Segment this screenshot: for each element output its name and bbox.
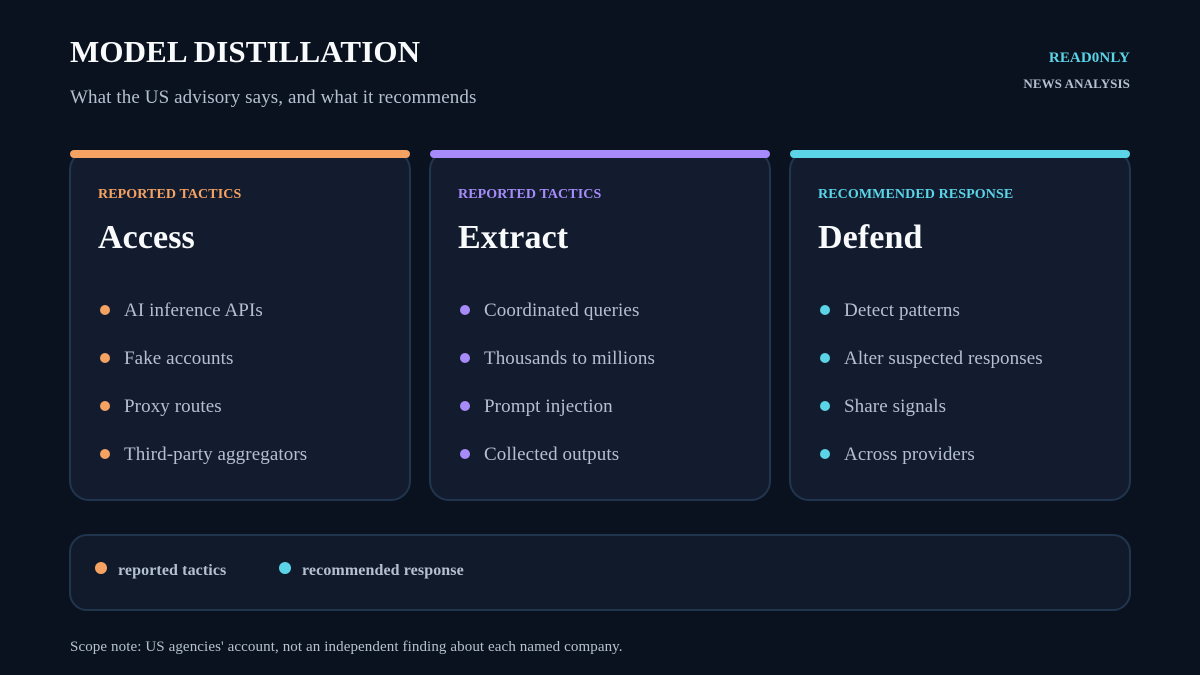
list item: Across providers: Across providers bbox=[844, 444, 975, 465]
panel heading: extract: Extract bbox=[458, 219, 568, 256]
list item: Alter suspected responses: Alter suspected responses bbox=[844, 348, 1043, 369]
brand tagline: NEWS ANALYSIS bbox=[1023, 76, 1130, 91]
list item: Fake accounts: Fake accounts bbox=[124, 348, 233, 369]
brand name: READ0NLY bbox=[1049, 50, 1130, 66]
bullet list: extract bbox=[460, 300, 655, 465]
panel heading: defend: Defend bbox=[818, 219, 922, 256]
subtitle: What the US advisory says, and what it recommends bbox=[70, 87, 476, 108]
list item: Thousands to millions: Thousands to millions bbox=[484, 348, 655, 369]
panel category label: defend: RECOMMENDED RESPONSE bbox=[818, 187, 1013, 202]
list item: Collected outputs: Collected outputs bbox=[484, 444, 619, 465]
panel: access bbox=[69, 150, 411, 501]
bullet list: access bbox=[100, 300, 307, 465]
legend item: reported tactics: reported tactics bbox=[118, 562, 226, 579]
list item: Share signals: Share signals bbox=[844, 396, 946, 417]
brand block bbox=[1023, 50, 1130, 91]
list item: Third-party aggregators: Third-party aggregators bbox=[124, 444, 307, 465]
panel accent bar: access bbox=[70, 150, 410, 158]
list item: Prompt injection: Prompt injection bbox=[484, 396, 613, 417]
bullet list: defend bbox=[820, 300, 1043, 465]
panel category label: access: REPORTED TACTICS bbox=[98, 187, 241, 202]
panel: extract bbox=[429, 150, 771, 501]
legend item: recommended response: recommended response bbox=[302, 562, 464, 579]
scope note: Scope note: US agencies' account, not an independent finding about each named company. bbox=[70, 639, 623, 655]
panel: defend bbox=[789, 150, 1131, 501]
legend bbox=[69, 534, 1131, 611]
panel heading: access: Access bbox=[98, 219, 195, 256]
panel accent bar: defend bbox=[790, 150, 1130, 158]
title: MODEL DISTILLATION bbox=[70, 34, 420, 69]
list item: Detect patterns: Detect patterns bbox=[844, 300, 960, 321]
list item: Coordinated queries: Coordinated queries bbox=[484, 300, 639, 321]
list item: Proxy routes: Proxy routes bbox=[124, 396, 222, 417]
panel category label: extract: REPORTED TACTICS bbox=[458, 187, 601, 202]
panel accent bar: extract bbox=[430, 150, 770, 158]
list item: AI inference APIs: AI inference APIs bbox=[124, 300, 263, 321]
